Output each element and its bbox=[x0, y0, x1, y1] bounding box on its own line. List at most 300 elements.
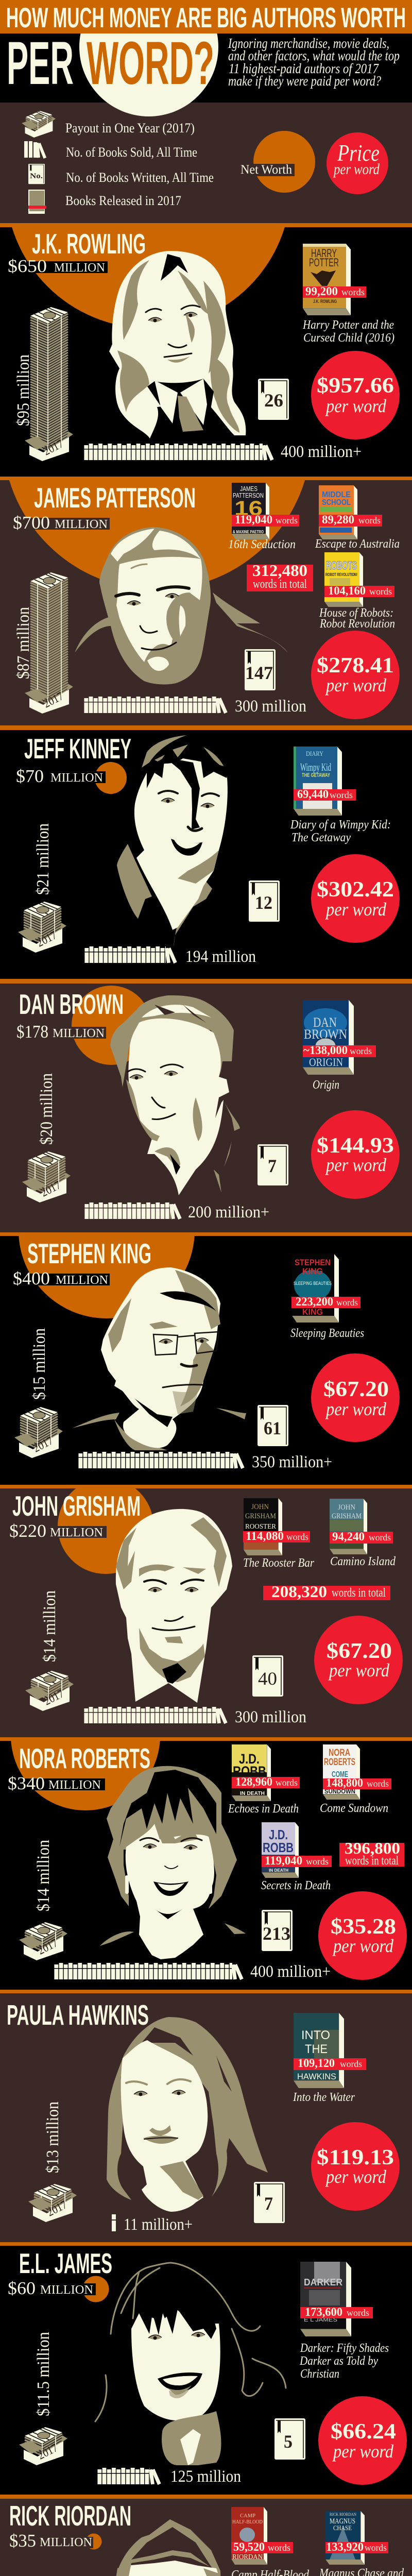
book: The Rooster Bar bbox=[244, 1498, 282, 1555]
net worth bbox=[16, 1022, 106, 1042]
book title: Sleeping Beauties bbox=[290, 1327, 364, 1340]
label: word count bbox=[323, 1776, 391, 1789]
words in total bbox=[263, 1582, 390, 1601]
book: Sleeping Beauties: SLEEPING BEAUTIES bbox=[294, 1281, 332, 1286]
name: DAN BROWN bbox=[19, 988, 124, 1020]
book: Magnus Chase: MAGNUS bbox=[330, 2517, 355, 2526]
payout stack bbox=[22, 1151, 71, 1202]
label: word count bbox=[303, 285, 366, 298]
book: Camino Island: GRISHAM bbox=[332, 1512, 362, 1520]
book: Camino Island: JOHN bbox=[338, 1503, 355, 1512]
price per word bbox=[311, 1353, 400, 1442]
book title: Robot Revolution bbox=[319, 617, 395, 631]
divider bbox=[0, 477, 412, 480]
book: The Rooster Bar: JOHN bbox=[251, 1503, 269, 1511]
book title: Harry Potter and the bbox=[302, 318, 394, 332]
book title bbox=[299, 2342, 389, 2381]
book: House of Robots bbox=[324, 552, 363, 607]
book: Camp Half-Blood Confidential: CAMP bbox=[240, 2513, 255, 2519]
section: James Patterson bbox=[0, 477, 412, 725]
legend: price circle: Price bbox=[337, 140, 380, 166]
book title: Camino Island bbox=[330, 1555, 396, 1568]
book title: The Rooster Bar bbox=[243, 1556, 315, 1570]
section: Dan Brown bbox=[0, 979, 412, 1232]
book title: Echoes in Death bbox=[228, 1802, 299, 1816]
books sold value: 300 million bbox=[235, 697, 306, 716]
price per word: per word bbox=[332, 1936, 394, 1956]
books written bbox=[262, 1910, 293, 1951]
books written: 26 bbox=[264, 390, 283, 411]
books sold value: 194 million bbox=[185, 947, 256, 966]
net worth bbox=[8, 256, 108, 276]
portrait bbox=[107, 2017, 268, 2212]
payout stack bbox=[25, 307, 73, 461]
net worth circle bbox=[58, 1488, 152, 1574]
label: word count bbox=[294, 2057, 366, 2070]
legend: price circle: per word bbox=[333, 161, 380, 178]
background bbox=[0, 480, 412, 725]
books sold row bbox=[84, 697, 228, 714]
portrait bbox=[117, 735, 229, 948]
price per word bbox=[311, 1110, 400, 1199]
net worth bbox=[9, 2531, 93, 2551]
net worth: $60 bbox=[8, 2278, 36, 2298]
divider bbox=[0, 223, 412, 227]
price per word bbox=[311, 854, 400, 943]
legend: price circle bbox=[327, 132, 388, 194]
divider bbox=[0, 1990, 412, 1993]
book title: The Getaway bbox=[291, 831, 351, 844]
book: Into the Water: WATER bbox=[296, 2056, 337, 2070]
net worth: $178 bbox=[16, 1022, 48, 1042]
net worth: $650 bbox=[8, 256, 47, 276]
payout value: $20 million bbox=[37, 1073, 56, 1145]
label: word count bbox=[325, 2540, 388, 2553]
header panel bbox=[0, 0, 412, 223]
label: word count bbox=[232, 513, 299, 527]
books written bbox=[245, 649, 276, 690]
legend: books written icon: No. bbox=[30, 172, 43, 180]
portrait bbox=[100, 1766, 246, 1959]
label: word count bbox=[231, 2540, 293, 2553]
books sold value: 400 million+ bbox=[250, 1962, 331, 1981]
label: word count: words bbox=[276, 515, 298, 526]
book title: Secrets in Death bbox=[261, 1879, 331, 1892]
book: Origin: ORIGIN bbox=[309, 1056, 343, 1069]
section: Nora Roberts bbox=[0, 1737, 412, 1980]
net worth circle bbox=[95, 762, 127, 794]
legend: books written label: No. of Books Written, All Time bbox=[66, 170, 214, 185]
words in total: 312,480 bbox=[252, 561, 307, 580]
intro text: make if they were paid per word? bbox=[228, 73, 381, 89]
portrait bbox=[95, 2263, 286, 2465]
book title: Christian bbox=[300, 2367, 339, 2381]
label: word count bbox=[243, 1530, 310, 1543]
divider bbox=[0, 725, 412, 730]
label: word count: 128,960 bbox=[235, 1775, 272, 1788]
book: Come Sundown bbox=[323, 1744, 360, 1800]
label: word count: 133,920 bbox=[326, 2540, 364, 2553]
books written: 61 bbox=[264, 1418, 281, 1438]
payout stack bbox=[25, 572, 73, 714]
books sold row bbox=[97, 2468, 161, 2485]
net worth circle bbox=[19, 1236, 195, 1318]
name: J.K. ROWLING bbox=[32, 228, 146, 260]
background bbox=[0, 1236, 412, 1485]
net worth: $400 bbox=[13, 1268, 50, 1289]
net worth: $35 bbox=[9, 2531, 36, 2551]
book: Magnus Chase: RICK RIORDAN bbox=[330, 2512, 356, 2517]
label: word count: words bbox=[369, 1532, 391, 1543]
divider bbox=[0, 2495, 412, 2499]
price per word bbox=[318, 2396, 407, 2485]
book title: Darker as Told by bbox=[299, 2354, 378, 2368]
legend: payout icon bbox=[22, 111, 56, 138]
name: JOHN GRISHAM bbox=[12, 1490, 141, 1522]
section: John Grisham bbox=[0, 1478, 412, 1737]
net worth: MILLION bbox=[55, 518, 108, 531]
book: Escape to Australia: MIDDLE bbox=[322, 490, 351, 499]
label: word count: 99,200 bbox=[305, 285, 338, 298]
net worth: MILLION bbox=[40, 2283, 93, 2297]
payout stack bbox=[14, 1407, 63, 1458]
label: word count: words bbox=[330, 790, 353, 800]
background bbox=[0, 2246, 412, 2495]
name: RICK RIORDAN bbox=[9, 2500, 131, 2532]
book: House of Robots: ROBOTS bbox=[326, 559, 357, 572]
book title bbox=[319, 606, 395, 631]
price per word: per word bbox=[324, 675, 387, 696]
book: Into the Water: INTO bbox=[301, 2028, 330, 2042]
net worth circle bbox=[82, 2276, 109, 2302]
book: Harry Potter: HARRY bbox=[311, 247, 337, 260]
payout value: $87 million bbox=[14, 607, 33, 679]
payout value: $13 million bbox=[43, 2102, 62, 2173]
book: Darker: DARKER bbox=[304, 2277, 342, 2287]
label: word count: 119,040 bbox=[235, 513, 272, 526]
portrait bbox=[108, 2519, 221, 2576]
price per word: $144.93 bbox=[317, 1134, 394, 1158]
books written bbox=[258, 379, 289, 420]
books written bbox=[274, 2418, 305, 2460]
book: 16th Seduction: JAMES bbox=[240, 485, 258, 493]
payout stack bbox=[19, 1922, 67, 1960]
orange title band bbox=[0, 0, 412, 33]
label: word count bbox=[303, 1044, 376, 1057]
net worth bbox=[8, 1773, 105, 1793]
price per word: $67.20 bbox=[327, 1639, 392, 1663]
portrait bbox=[75, 527, 288, 684]
book title: Into the Water bbox=[293, 2091, 355, 2104]
label: word count: 109,120 bbox=[298, 2057, 335, 2070]
label: word count: words bbox=[336, 1297, 358, 1308]
price per word: $119.13 bbox=[317, 2146, 394, 2170]
label: word count: words bbox=[367, 1778, 389, 1789]
title PER: PER bbox=[7, 29, 74, 97]
label: word count: 119,040 bbox=[265, 1854, 302, 1867]
book title bbox=[302, 318, 394, 345]
payout stack: 2017 bbox=[31, 1434, 55, 1455]
book title: Diary of a Wimpy Kid: bbox=[290, 818, 391, 832]
books written bbox=[258, 1144, 288, 1185]
book title: 16th Seduction bbox=[228, 538, 296, 551]
books written: 12 bbox=[255, 892, 272, 913]
label: word count: 59,520 bbox=[233, 2540, 265, 2553]
words in total bbox=[339, 1839, 404, 1868]
label: word count: words bbox=[347, 2308, 369, 2318]
net worth circle bbox=[11, 1741, 160, 1810]
price per word: $957.66 bbox=[317, 374, 394, 398]
legend background bbox=[0, 103, 412, 223]
price per word: per word bbox=[324, 899, 387, 920]
legend: net worth circle: Net Worth bbox=[241, 163, 292, 177]
divider bbox=[0, 2242, 412, 2246]
label: word count: 223,200 bbox=[296, 1295, 333, 1308]
book: Escape to Australia: SCHOOL bbox=[322, 498, 351, 507]
payout value: $14 million bbox=[40, 1590, 59, 1662]
book: House of Robots: ROBOT REVOLUTION! bbox=[325, 572, 357, 577]
payout stack: 2017 bbox=[45, 2198, 69, 2219]
book: Darker: E L JAMES bbox=[304, 2317, 337, 2323]
background bbox=[0, 1993, 412, 2242]
book title: Origin bbox=[313, 1078, 339, 1092]
label: word count bbox=[300, 2306, 373, 2318]
book: 16th Seduction: 16 bbox=[234, 497, 263, 520]
book: Camp Half-Blood Confidential: HALF-BLOOD bbox=[232, 2519, 263, 2525]
books written bbox=[254, 2182, 285, 2223]
legend: books released label: Books Released in 2017 bbox=[65, 193, 181, 208]
book: Echoes in Death bbox=[232, 1744, 271, 1801]
words in total: 396,800 bbox=[345, 1839, 400, 1857]
net worth: $700 bbox=[13, 513, 50, 533]
background bbox=[0, 1488, 412, 1737]
books written: 147 bbox=[245, 663, 273, 683]
price per word: per word bbox=[324, 1399, 387, 1419]
books sold value: 125 million bbox=[170, 2467, 241, 2486]
book: Darker bbox=[300, 2262, 351, 2336]
book: Come Sundown: NORA bbox=[329, 1748, 350, 1758]
book: 16th Seduction bbox=[232, 483, 269, 539]
label: word count bbox=[291, 1295, 360, 1308]
books sold value: 200 million+ bbox=[188, 1203, 269, 1222]
section: Rick Riordan bbox=[0, 2495, 412, 2576]
book title: House of Robots: bbox=[319, 606, 393, 620]
book: Into the Water: THE bbox=[305, 2042, 328, 2056]
net worth: MILLION bbox=[50, 771, 103, 785]
portrait bbox=[72, 1267, 246, 1450]
price per word bbox=[311, 351, 400, 439]
label: word count bbox=[294, 788, 356, 801]
book: Sleeping Beauties bbox=[292, 1254, 339, 1323]
book: Magnus Chase bbox=[325, 2511, 365, 2565]
book: Into the Water: HAWKINS bbox=[297, 2072, 336, 2081]
words in total bbox=[247, 561, 313, 591]
book: Origin: DAN bbox=[313, 1015, 337, 1030]
section: E.L. James bbox=[0, 2242, 412, 2495]
words in total: 208,320 bbox=[271, 1582, 327, 1601]
legend: books sold label: No. of Books Sold, All Time bbox=[66, 145, 197, 160]
net worth: $340 bbox=[8, 1773, 45, 1793]
name: JEFF KINNEY bbox=[24, 733, 131, 765]
legend: payout label: Payout in One Year (2017) bbox=[65, 121, 195, 135]
book title: Come Sundown bbox=[320, 1802, 388, 1815]
label: word count: words bbox=[365, 2543, 387, 2553]
label: word count bbox=[262, 1854, 332, 1867]
books written: 5 bbox=[284, 2431, 293, 2452]
net worth bbox=[9, 1521, 107, 1541]
intro text: 11 highest-paid authors of 2017 bbox=[229, 61, 379, 76]
name: E.L. JAMES bbox=[19, 2247, 112, 2279]
payout stack bbox=[25, 1671, 74, 1711]
book: Origin: BROWN bbox=[304, 1027, 347, 1042]
name: PAULA HAWKINS bbox=[7, 1999, 149, 2031]
book: Sleeping Beauties: KING bbox=[302, 1266, 323, 1276]
price per word: per word bbox=[328, 1660, 390, 1681]
net worth: MILLION bbox=[53, 1027, 105, 1040]
book: 16th Seduction: & MAXINE PAETRO bbox=[233, 530, 264, 534]
net worth: $220 bbox=[9, 1521, 46, 1541]
label: word count: 148,800 bbox=[326, 1776, 363, 1789]
book: Escape to Australia bbox=[319, 485, 357, 539]
divider bbox=[0, 1485, 412, 1488]
book: Echoes in Death: ROBB bbox=[233, 1764, 266, 1779]
label: word count bbox=[330, 1530, 393, 1544]
price per word: $278.41 bbox=[317, 654, 394, 677]
books sold value: 350 million+ bbox=[252, 1453, 332, 1471]
background bbox=[0, 984, 412, 1232]
books written: 7 bbox=[268, 1156, 277, 1176]
payout stack: 2017 bbox=[35, 928, 59, 950]
divider bbox=[0, 1232, 412, 1236]
book title bbox=[290, 818, 391, 844]
name: NORA ROBERTS bbox=[19, 1742, 150, 1774]
legend: books written icon bbox=[28, 164, 45, 184]
words in total: words in total bbox=[253, 578, 307, 591]
net worth: MILLION bbox=[56, 1274, 108, 1287]
book: Sleeping Beauties: STEPHEN bbox=[295, 1258, 331, 1267]
label: word count bbox=[324, 584, 394, 597]
books written: 213 bbox=[263, 1923, 290, 1944]
book: Origin bbox=[303, 1000, 354, 1075]
label: word count: words bbox=[358, 515, 381, 526]
price per word bbox=[314, 1616, 403, 1704]
label: word count: 114,080 bbox=[246, 1530, 284, 1543]
label: word count: 104,160 bbox=[328, 584, 366, 597]
books written: 7 bbox=[264, 2193, 273, 2214]
book title: Darker: Fifty Shades bbox=[300, 2342, 389, 2355]
background bbox=[0, 730, 412, 979]
price per word: $302.42 bbox=[317, 878, 394, 902]
payout value: $95 million bbox=[14, 354, 33, 426]
price per word: per word bbox=[324, 1155, 387, 1175]
books sold value: 300 million bbox=[235, 1708, 306, 1726]
price per word bbox=[311, 2122, 400, 2211]
divider bbox=[0, 1737, 412, 1741]
intro text bbox=[228, 36, 400, 89]
book: Magnus Chase: CHASE bbox=[333, 2524, 352, 2532]
net worth: MILLION bbox=[40, 2536, 92, 2549]
label: word count: words bbox=[340, 2059, 362, 2069]
black intro band bbox=[0, 33, 412, 103]
book: Secrets in Death: ROBB bbox=[263, 1840, 294, 1855]
book: Harry Potter: J.K. ROWLING bbox=[313, 299, 337, 304]
words in total: words in total bbox=[332, 1586, 386, 1600]
label: word count bbox=[232, 1775, 300, 1788]
payout stack: 2017 bbox=[41, 689, 65, 710]
book: Come Sundown: COME bbox=[332, 1770, 348, 1779]
label: word count: words bbox=[286, 1532, 308, 1542]
price per word bbox=[318, 1891, 407, 1980]
label: word count: 173,600 bbox=[305, 2306, 342, 2318]
books sold value: 400 million+ bbox=[281, 443, 362, 461]
legend: books released icon bbox=[28, 190, 46, 214]
book: Secrets in Death bbox=[262, 1822, 299, 1878]
books sold row bbox=[78, 1452, 245, 1469]
payout stack: 2017 bbox=[39, 1178, 63, 1199]
books sold row bbox=[112, 2214, 116, 2231]
label: word count bbox=[319, 513, 382, 527]
cream circle behind WORD bbox=[79, 33, 218, 116]
book title: Escape to Australia bbox=[315, 537, 400, 551]
label: word count: 69,440 bbox=[297, 788, 329, 801]
legend: books sold icon bbox=[24, 141, 46, 159]
section: Jeff Kinney bbox=[0, 725, 412, 979]
label: word count: words bbox=[268, 2543, 290, 2553]
books written: 40 bbox=[258, 1668, 277, 1689]
net worth: MILLION bbox=[48, 1778, 101, 1792]
label: word count: 94,240 bbox=[332, 1530, 365, 1543]
books sold row bbox=[84, 444, 274, 461]
background bbox=[0, 2499, 412, 2576]
portrait bbox=[109, 251, 246, 438]
payout stack: 2017 bbox=[36, 2441, 60, 2462]
label: word count: words bbox=[306, 1856, 329, 1867]
net worth bbox=[13, 1268, 110, 1289]
net worth bbox=[8, 2278, 96, 2298]
label: word count: words bbox=[341, 287, 365, 297]
book: The Rooster Bar: GRISHAM bbox=[245, 1512, 276, 1520]
books sold row bbox=[84, 1707, 228, 1724]
divider bbox=[0, 979, 412, 984]
price per word: per word bbox=[332, 2441, 394, 2462]
book: Diary of a Wimpy Kid: DIARY bbox=[306, 750, 324, 757]
net worth: MILLION bbox=[54, 261, 105, 275]
book: Diary of a Wimpy Kid: THE GETAWAY bbox=[302, 772, 330, 778]
book: Diary of a Wimpy Kid bbox=[294, 747, 342, 816]
label: word count: words bbox=[369, 586, 392, 597]
payout value: $21 million bbox=[33, 823, 53, 895]
book: Sleeping Beauties: KING bbox=[302, 1307, 323, 1317]
books sold row bbox=[84, 1202, 182, 1219]
net worth bbox=[13, 513, 110, 533]
label: word count: ~138,000 bbox=[303, 1044, 348, 1057]
book: Harry Potter: POTTER bbox=[309, 256, 339, 269]
background bbox=[0, 1741, 412, 1990]
book: Into the Water bbox=[294, 2013, 344, 2088]
payout value: $15 million bbox=[30, 1328, 49, 1400]
net worth circle bbox=[9, 480, 305, 581]
price per word: per word bbox=[324, 2166, 387, 2187]
books sold row bbox=[84, 946, 177, 963]
book: Harry Potter bbox=[303, 244, 351, 315]
words in total: words in total bbox=[345, 1854, 399, 1868]
payout stack bbox=[19, 2427, 67, 2465]
payout stack bbox=[28, 2184, 77, 2222]
section: J.K. Rowling bbox=[0, 223, 412, 461]
price per word bbox=[311, 631, 400, 719]
books written bbox=[252, 1655, 283, 1697]
portrait bbox=[116, 1509, 232, 1703]
